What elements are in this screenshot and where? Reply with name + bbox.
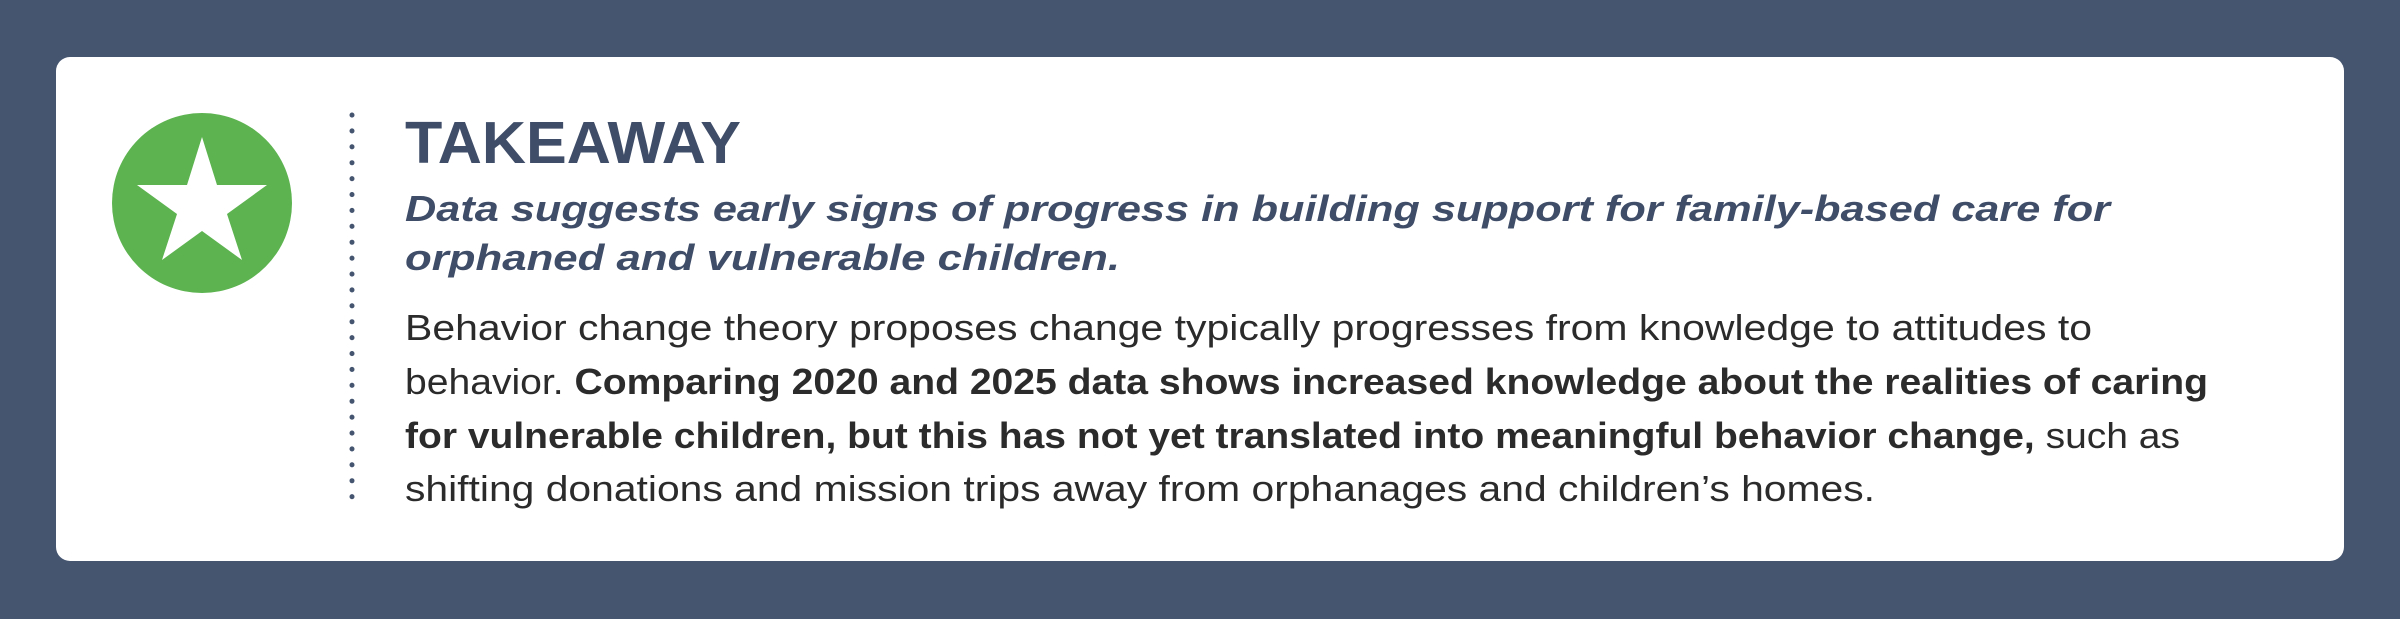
subtitle: orphaned and vulnerable children. [405,237,1120,278]
title: TAKEAWAY [405,110,741,176]
body text [405,307,2208,509]
subtitle: Data suggests early signs of progress in building support for family-based care for [405,188,2112,229]
panel: takeaway card [56,57,2344,561]
dotted divider [350,115,354,510]
subtitle [405,188,2112,278]
body text: shifting donations and mission trips away from orphanages and children’s homes. [405,468,1875,509]
body text: Behavior change theory proposes change typically progresses from knowledge to attitudes to [405,307,2092,348]
body text: behavior. Comparing 2020 and 2025 data shows increased knowledge about the realities of caring [405,361,2208,402]
body text: for vulnerable children, but this has not yet translated into meaningful behavior change, such as [405,415,2180,456]
icon: green star circle [112,113,292,293]
